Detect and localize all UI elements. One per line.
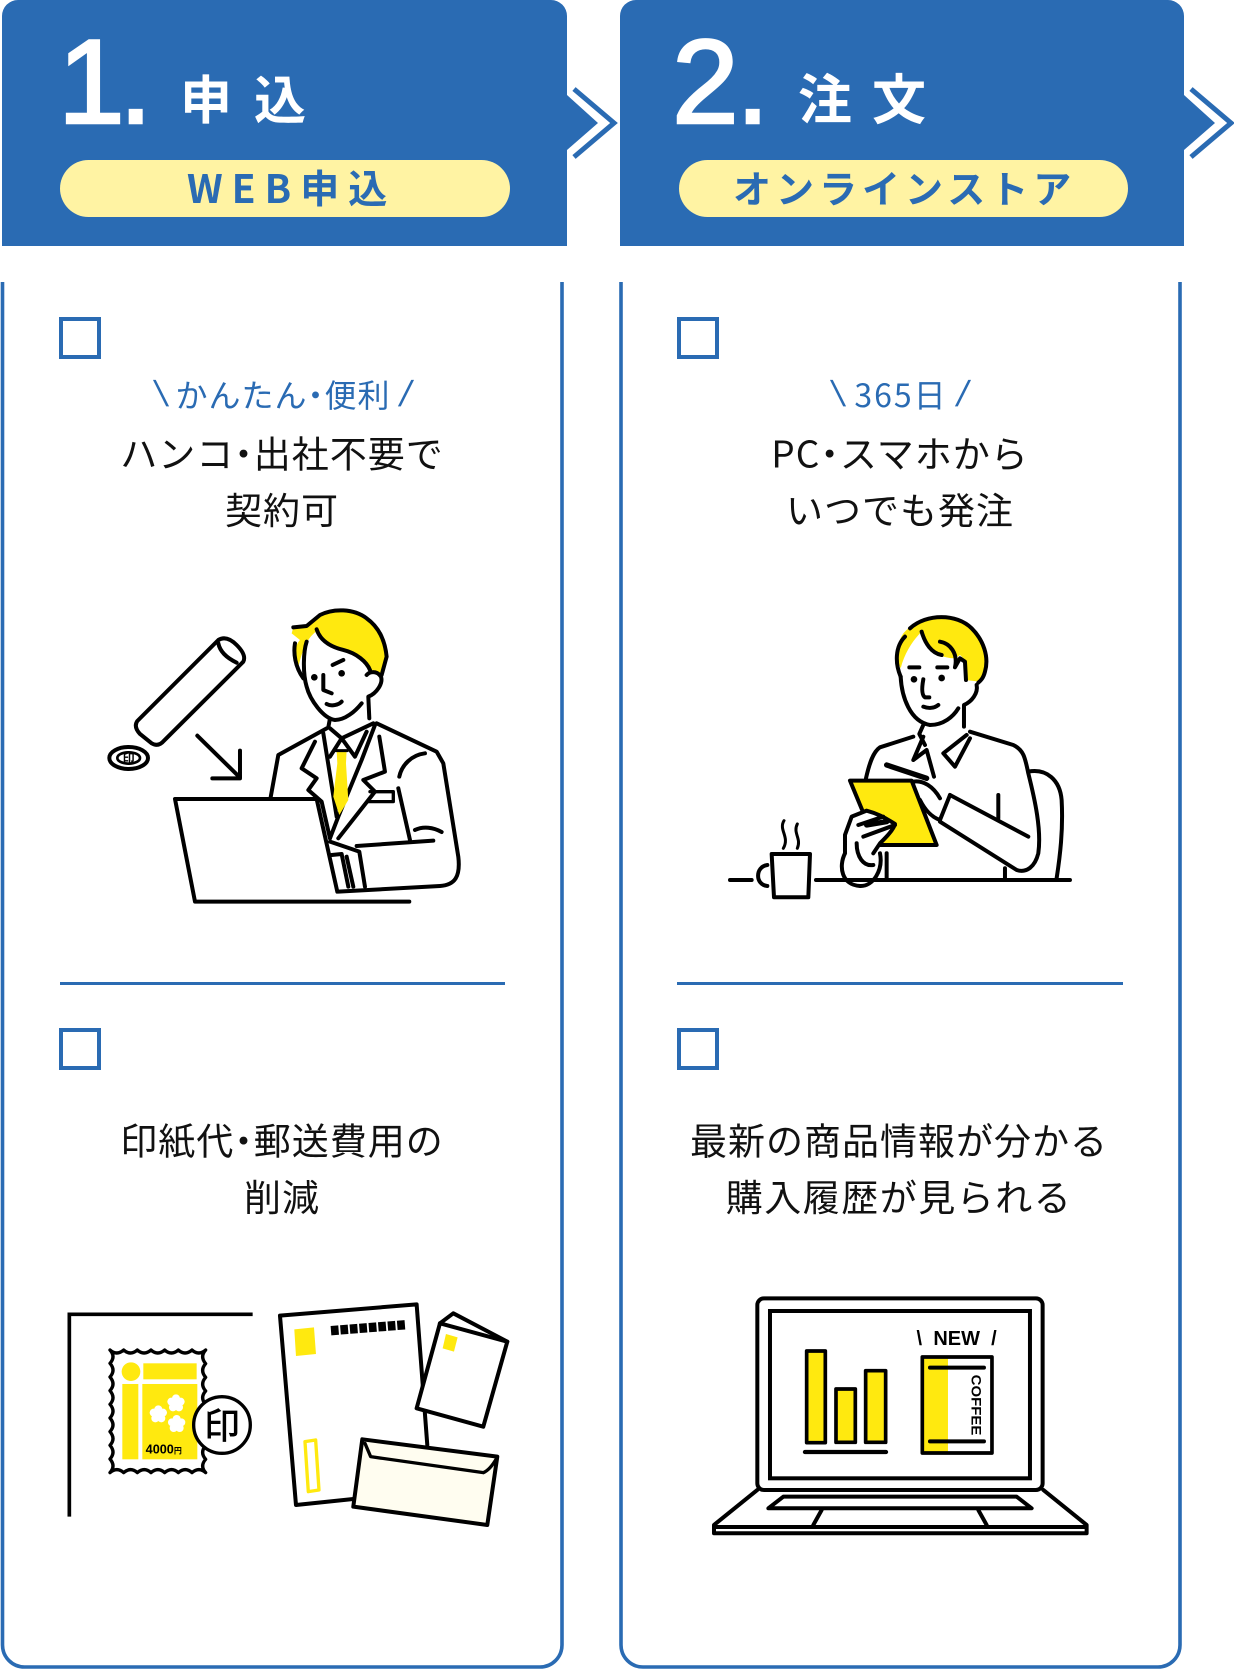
pill: web application: WEB申込 — [187, 159, 396, 215]
text: latest product info and history: 購入履歴が見られる — [726, 1168, 1072, 1222]
laptop — [175, 799, 409, 902]
text: order anytime: PC・スマホから — [771, 424, 1029, 478]
subheading: 365 days: \ — [828, 373, 849, 414]
subheading: easy and convenient: / — [396, 373, 416, 414]
illustration: revenue stamp and documents — [69, 1304, 507, 1525]
illustration: man with stamp and laptop: 印 — [123, 749, 135, 766]
envelope — [353, 1439, 497, 1525]
step number 2 — [672, 15, 769, 149]
text: stamp and mailing cost reduction: 印紙代・郵送費用の — [120, 1112, 444, 1166]
illustration: revenue stamp and documents: 印 — [204, 1398, 240, 1450]
folded card — [440, 1313, 507, 1342]
step number 1: 1 — [58, 15, 125, 149]
illustration: laptop with charts and new coffee — [714, 1298, 1087, 1533]
illustration: man with tablet and coffee — [730, 617, 1070, 897]
divider — [60, 982, 505, 985]
suit body — [271, 723, 459, 892]
coffee package: COFFEE — [969, 1375, 985, 1435]
hair outline — [293, 610, 387, 678]
hair — [897, 618, 986, 682]
panel: step 1 body — [2, 282, 562, 1667]
step title: 注文 — [798, 56, 946, 135]
illustration: man with stamp and laptop — [109, 610, 459, 902]
header: step 1 — [2, 0, 614, 246]
arrow 1 — [574, 89, 614, 157]
name badge — [368, 792, 393, 802]
stamp cylinder — [136, 638, 244, 745]
face — [901, 667, 977, 745]
stamp value: 4000円 — [146, 1442, 182, 1456]
hair — [292, 610, 387, 675]
step title: 申込 — [180, 59, 328, 134]
seal — [194, 1397, 250, 1453]
text: no stamp needed: ハンコ・出社不要で — [120, 424, 444, 478]
stamp impression — [109, 747, 148, 769]
arrow 2 — [1191, 89, 1231, 157]
bar chart — [807, 1351, 886, 1443]
shirt — [866, 732, 1062, 878]
stamp yellow areas — [122, 1362, 197, 1459]
writing hand — [913, 781, 950, 820]
panel outline — [2, 282, 562, 1667]
tablet — [850, 781, 937, 845]
subheading: 365 days — [828, 371, 973, 417]
holding hand — [842, 811, 895, 886]
checkbox 2 — [679, 1030, 717, 1068]
text: stamp and mailing cost reduction: 削減 — [244, 1168, 320, 1222]
coffee cup — [772, 854, 810, 897]
coffee package — [922, 1357, 992, 1453]
pen — [887, 765, 927, 778]
header background — [620, 0, 1215, 246]
steam — [782, 821, 799, 848]
subheading: 365 days: / — [953, 373, 973, 414]
step number 1: . — [119, 15, 152, 149]
laptop base — [714, 1490, 1087, 1533]
divider — [677, 982, 1123, 985]
pill: online store: オンラインストア — [733, 159, 1076, 214]
text: order anytime: いつでも発注 — [786, 481, 1014, 535]
document — [280, 1304, 427, 1505]
revenue stamp — [110, 1350, 206, 1473]
panel: step 2 body — [621, 282, 1180, 1667]
subheading: easy and convenient: かんたん・便利 — [175, 371, 391, 417]
laptop screen — [757, 1298, 1043, 1490]
step number 2: . — [736, 15, 769, 149]
text: no stamp needed: 契約可 — [225, 481, 339, 535]
address dots — [331, 1325, 407, 1331]
pill: web application — [60, 159, 510, 217]
new label: \ NEW / — [917, 1328, 997, 1350]
checkbox 2 — [61, 1030, 99, 1068]
arrow — [197, 736, 240, 778]
checkbox 1 — [61, 319, 99, 357]
panel outline — [621, 282, 1180, 1667]
text: latest product info and history: 最新の商品情報が分かる — [690, 1112, 1108, 1166]
subheading: easy and convenient: \ — [151, 373, 172, 414]
subheading: 365 days: 365日 — [854, 371, 948, 417]
tie — [333, 750, 348, 815]
checkbox 1 — [679, 319, 717, 357]
header: step 2 — [620, 0, 1231, 246]
desk — [730, 874, 1070, 886]
hair outline — [897, 617, 986, 683]
corner line — [69, 1314, 253, 1517]
blossom — [150, 1394, 185, 1432]
face — [304, 642, 381, 727]
header background — [2, 0, 598, 246]
step number 2: 2 — [672, 15, 739, 149]
